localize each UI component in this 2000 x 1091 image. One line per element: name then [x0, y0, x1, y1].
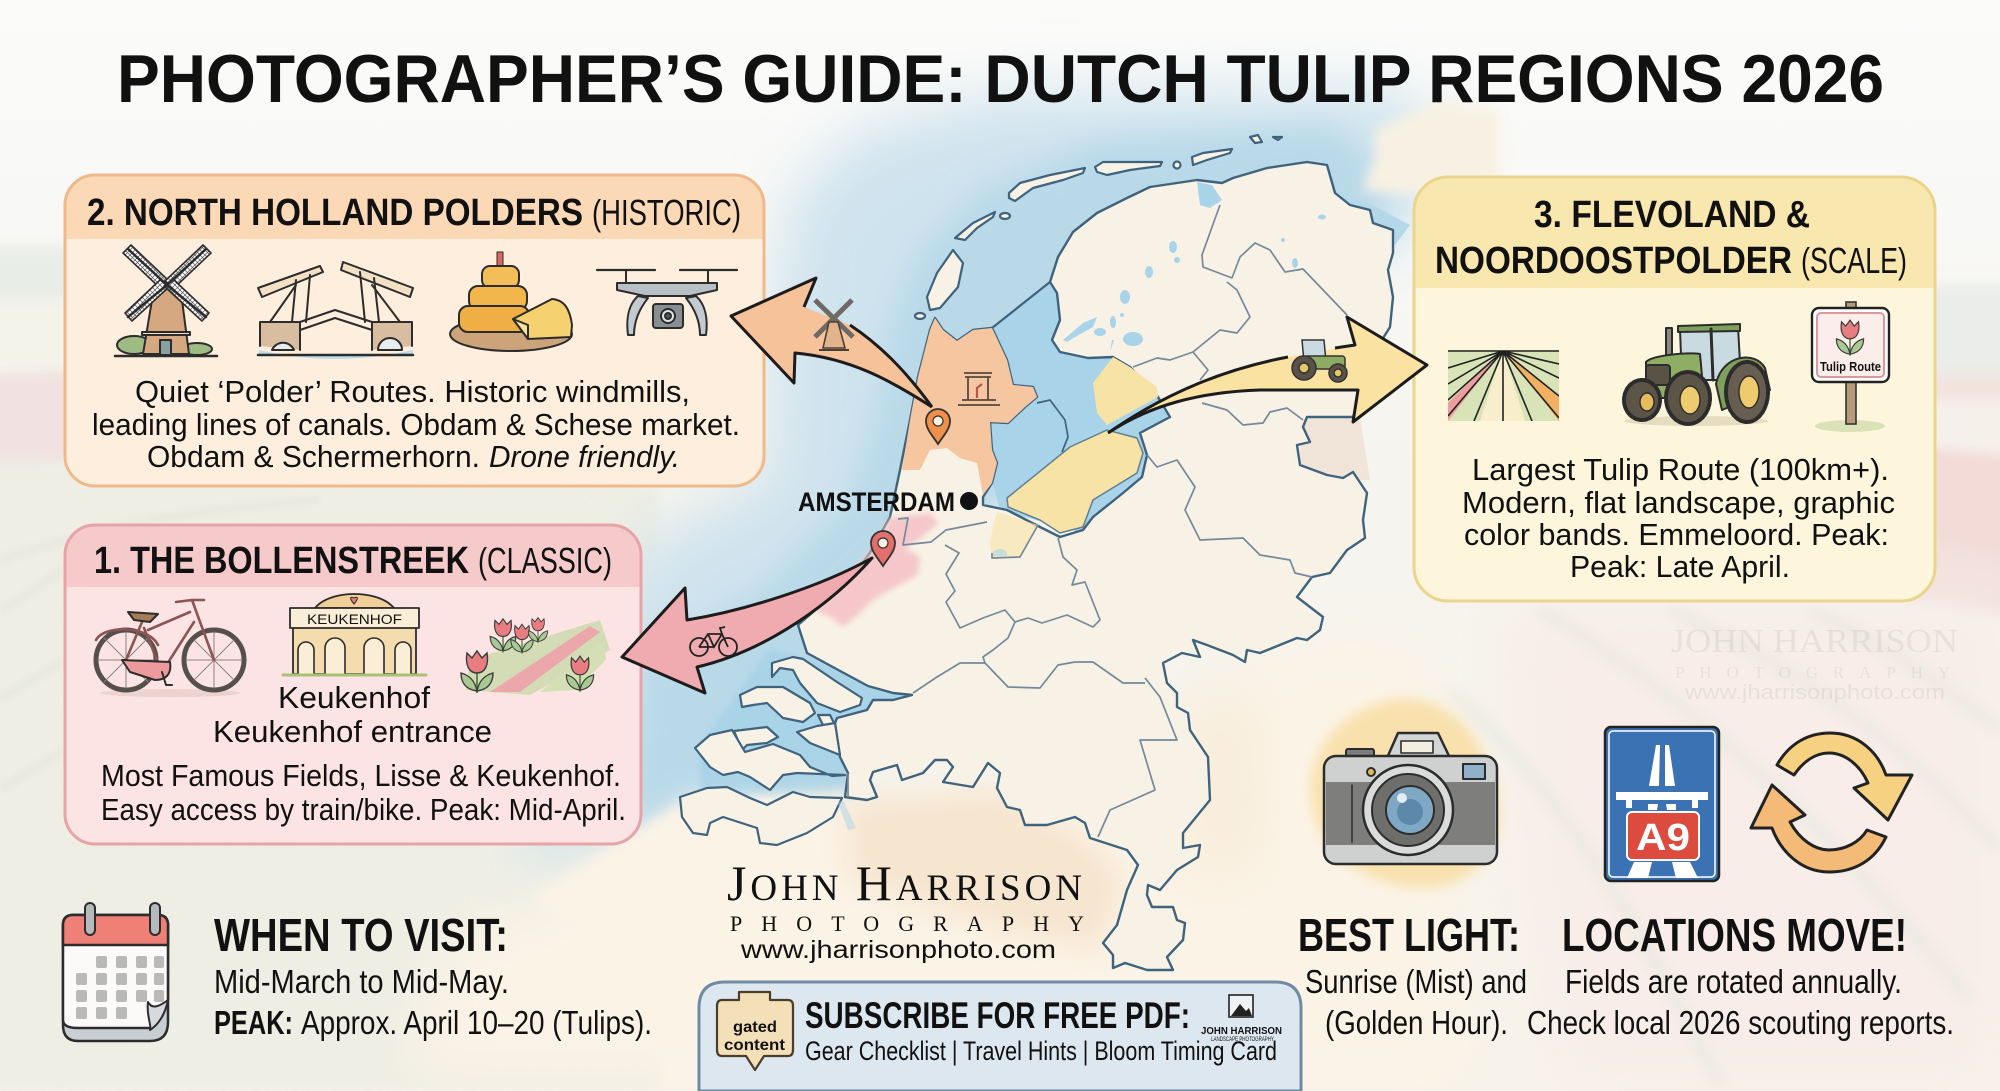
icon: cheese tower — [450, 252, 572, 351]
inland water — [838, 182, 1326, 830]
icon: bicycle — [96, 600, 244, 697]
text: Gear Checklist | Travel Hints | Bloom Timing Card — [805, 1036, 1277, 1066]
body text: Modern, flat landscape, graphic — [1462, 485, 1895, 520]
caption: Keukenhof entrance — [213, 714, 492, 749]
icon: drawbridge — [258, 262, 413, 359]
watermark: faint logo at right — [1671, 623, 1958, 704]
arrow: Bollenstreek to panel 1 — [622, 558, 872, 693]
logo: John Harrison Photography: PHOTOGRAPHY — [730, 911, 1084, 936]
text: Sunrise (Mist) and — [1305, 963, 1527, 1000]
logo: John Harrison Photography — [727, 855, 1084, 964]
icon: Tulip Route sign — [1812, 302, 1889, 432]
arrow: North Holland to panel 2 — [731, 278, 932, 407]
icon: field colour bands — [1448, 350, 1559, 421]
text: (Golden Hour). — [1325, 1004, 1508, 1041]
caption: Keukenhof — [278, 680, 430, 715]
body text — [1462, 452, 1895, 584]
mini logo: LANDSCAPE PHOTOGRAPHY — [1211, 1037, 1274, 1043]
icon: Tulip Route sign: Tulip Route — [1820, 360, 1881, 374]
icon: A9 motorway sign: A9 — [1636, 817, 1690, 859]
icon: rotation arrows — [1751, 733, 1912, 872]
neighbouring land wash (Belgium, Germany) — [400, 100, 1500, 1080]
panel: The Bollenstreek — [65, 525, 641, 844]
region: North Holland — [902, 318, 1037, 495]
badge: gated content — [717, 992, 793, 1070]
title: PHOTOGRAPHER’S GUIDE: DUTCH TULIP REGIONS 2026 — [117, 41, 1884, 117]
text — [214, 963, 652, 1041]
land: mainland Netherlands — [798, 162, 1393, 970]
icon: tulip field — [461, 618, 610, 695]
text — [1527, 963, 1954, 1041]
body text: Most Famous Fields, Lisse & Keukenhof. — [101, 758, 621, 793]
badge: gated content: gated — [733, 1019, 777, 1036]
map: Netherlands watercolor map — [400, 90, 1500, 1080]
body text: Easy access by train/bike. Peak: Mid-April. — [101, 792, 626, 827]
icon: small bridge on North Holland — [958, 373, 1000, 405]
heading: SUBSCRIBE FOR FREE PDF: — [805, 995, 1190, 1036]
icon: tractor — [1624, 324, 1770, 426]
arrow: Flevoland to panel 3 — [1108, 317, 1427, 433]
caption — [213, 680, 492, 749]
heading: NOORDOOSTPOLDER — [1435, 240, 1792, 282]
text — [1305, 963, 1527, 1041]
heading: WHEN TO VISIT: — [214, 909, 508, 961]
icon: windmill — [115, 245, 217, 356]
panel: Flevoland and Noordoostpolder — [1414, 177, 1935, 601]
block: locations move — [1527, 727, 1954, 1041]
icon: map pin North Holland — [926, 409, 950, 444]
text: Approx. April 10–20 (Tulips). — [301, 1004, 652, 1041]
logo: John Harrison Photography: JOHN HARRISON — [727, 855, 1082, 911]
heading: LOCATIONS MOVE! — [1562, 909, 1907, 961]
icon: A9 motorway sign — [1605, 727, 1719, 881]
heading — [1435, 194, 1907, 282]
watermark: faint logo at right: www.jharrisonphoto.com — [1684, 682, 1945, 704]
region: Bollenstreek — [815, 513, 939, 627]
mini logo: JOHN HARRISON — [1201, 1026, 1282, 1037]
body text: Largest Tulip Route (100km+). — [1472, 452, 1889, 487]
icon: small bicycle on arrow — [690, 627, 737, 656]
heading: (SCALE) — [1801, 240, 1907, 281]
mini logo — [1201, 995, 1282, 1043]
body text: Drone friendly. — [489, 439, 680, 474]
icon: calendar — [63, 903, 168, 1041]
icon: map pin Bollenstreek — [871, 531, 895, 566]
regions: Flevoland and Noordoostpolder — [990, 357, 1158, 558]
icon: Keukenhof gate: KEUKENHOF — [307, 611, 402, 627]
islands and Zeeland — [680, 135, 1282, 845]
body text: color bands. Emmeloord. Peak: — [1464, 517, 1889, 552]
block: when to visit — [63, 903, 652, 1041]
watermark: faint logo at right: JOHN HARRISON — [1671, 623, 1958, 660]
logo: John Harrison Photography: www.jharrisonphoto.com — [740, 936, 1056, 964]
icon: camera with sun wash — [1311, 698, 1500, 888]
icon: drone — [597, 270, 737, 335]
icon: small tractor on arrow — [1292, 340, 1347, 382]
heading: (HISTORIC) — [592, 192, 741, 233]
body text — [101, 758, 626, 827]
icon: small windmill on arrow — [815, 300, 853, 350]
body text: Obdam & Schermerhorn. — [147, 439, 480, 474]
body text — [92, 374, 740, 474]
block: best light — [1298, 698, 1527, 1041]
heading: (CLASSIC) — [478, 540, 612, 581]
watermark: faint logo at right: PHOTOGRAPHY — [1675, 663, 1950, 682]
sea wash — [530, 90, 1450, 890]
body text: Peak: Late April. — [1570, 549, 1790, 584]
text: PEAK: — [214, 1004, 293, 1041]
heading: 2. NORTH HOLLAND POLDERS — [87, 192, 583, 234]
heading: BEST LIGHT: — [1298, 909, 1520, 961]
body text: leading lines of canals. Obdam & Schese market. — [92, 407, 740, 442]
badge: gated content: content — [724, 1037, 786, 1054]
icon: Keukenhof gate — [283, 594, 426, 675]
province borders — [848, 205, 1347, 837]
text: Fields are rotated annually. — [1565, 963, 1902, 1000]
panel: subscribe — [699, 982, 1301, 1091]
heading: 3. FLEVOLAND & — [1534, 194, 1810, 236]
body text: Quiet ‘Polder’ Routes. Historic windmills, — [135, 374, 690, 409]
heading: 1. THE BOLLENSTREEK — [94, 540, 469, 582]
panel: North Holland Polders — [65, 175, 764, 486]
text: Mid-March to Mid-May. — [214, 963, 509, 1000]
map label: Amsterdam: AMSTERDAM — [798, 487, 955, 517]
